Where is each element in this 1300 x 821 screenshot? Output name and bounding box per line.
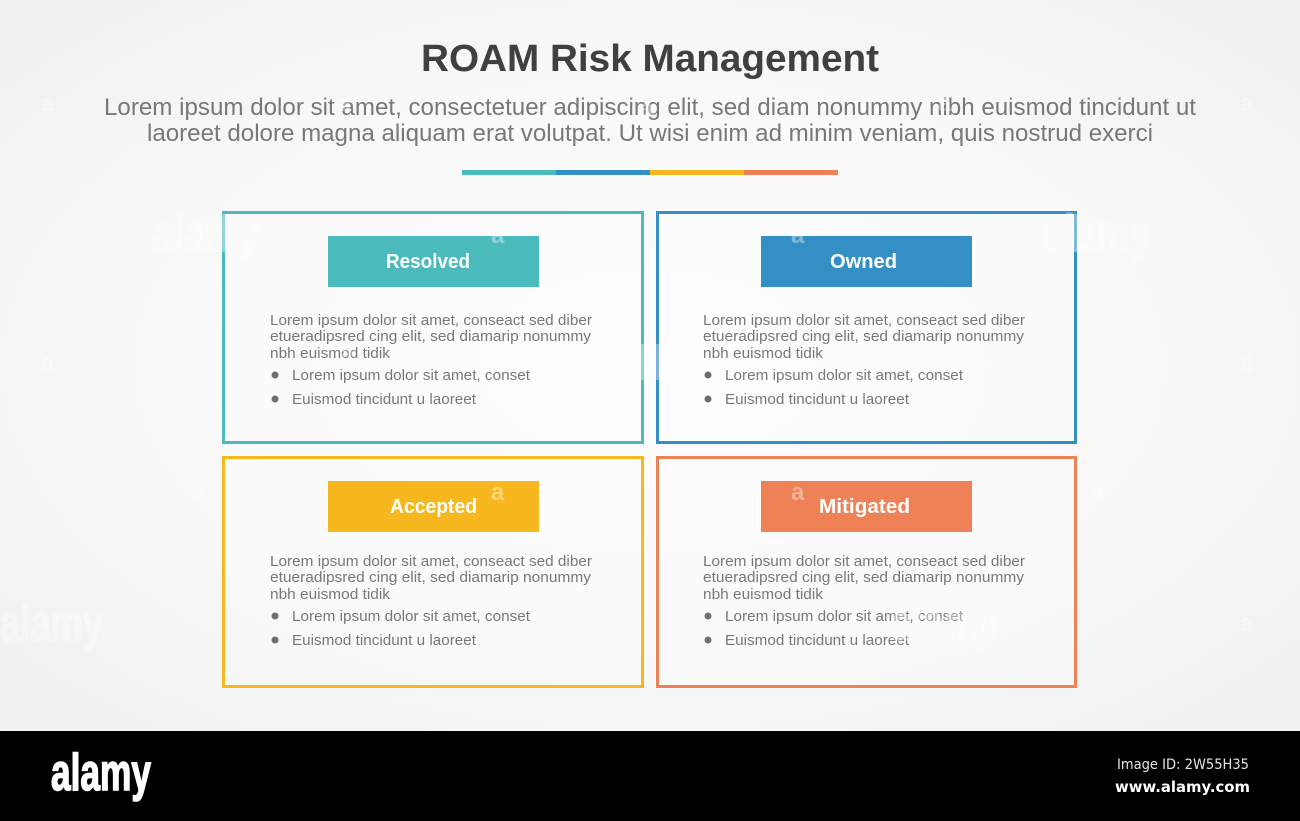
bullet list: Owned: Lorem ipsum dolor sit amet, conset xyxy=(725,368,963,384)
label: Mitigated: Mitigated xyxy=(819,496,910,518)
four-colour divider xyxy=(462,170,838,175)
text block: Owned description: nbh euismod tidik xyxy=(703,346,824,362)
text block: Owned description: Lorem ipsum dolor sit amet, conseact sed diber xyxy=(703,313,1025,329)
text block: Owned description xyxy=(703,313,1025,362)
stock photo watermarks xyxy=(0,90,1254,651)
stock photo watermarks: a xyxy=(791,479,805,506)
panel: Accepted xyxy=(224,458,642,686)
stock photo watermarks: a xyxy=(1240,350,1254,377)
stock photo watermarks: alamy xyxy=(1043,205,1151,261)
text block: Accepted description: Lorem ipsum dolor sit amet, conseact sed diber xyxy=(270,554,592,570)
stock photo watermarks: alamy xyxy=(891,595,999,651)
label: Resolved: Resolved xyxy=(386,251,470,273)
panel: Owned xyxy=(658,212,1076,442)
footer image id: Image ID: 2W55H35 xyxy=(1117,757,1249,773)
stock photo watermarks: a xyxy=(1240,90,1254,117)
text block: Mitigated description: etueradipsred cing elit, sed diamarip nonummy xyxy=(703,570,1025,586)
text block: Accepted description: nbh euismod tidik xyxy=(270,587,391,603)
panel: Mitigated xyxy=(658,458,1076,686)
bullet list: Owned: Euismod tincidunt u laoreet xyxy=(725,392,909,408)
text block: Accepted description xyxy=(270,554,592,603)
label: Owned xyxy=(761,236,972,287)
bullet list: Accepted: Lorem ipsum dolor sit amet, conset xyxy=(292,609,530,625)
subtitle text: laoreet dolore magna aliquam erat volutpat. Ut wisi enim ad minim veniam, quis nostrud exerci xyxy=(147,120,1153,147)
bullet list: Owned xyxy=(704,368,963,408)
title: ROAM Risk Management xyxy=(421,38,879,80)
stock photo watermarks: a xyxy=(338,90,352,117)
bullet list: Accepted: Euismod tincidunt u laoreet xyxy=(292,633,476,649)
bullet list: Resolved xyxy=(272,368,530,408)
stock photo watermarks: a xyxy=(640,95,654,122)
stock photo watermarks: a xyxy=(940,350,954,377)
stock photo watermarks: a xyxy=(340,340,354,367)
label: Mitigated xyxy=(761,481,972,532)
subtitle text xyxy=(104,94,1196,147)
bullet list: Resolved: Lorem ipsum dolor sit amet, conset xyxy=(292,368,530,384)
stock photo watermarks: alamy xyxy=(152,205,260,261)
bullet list: Mitigated: Lorem ipsum dolor sit amet, conset xyxy=(725,609,963,625)
stock photo watermarks: a xyxy=(41,90,55,117)
footer bar xyxy=(0,731,1300,821)
stock photo watermarks: a xyxy=(41,350,55,377)
text block: Mitigated description xyxy=(703,554,1025,603)
label: Accepted xyxy=(328,481,539,532)
bullet list: Mitigated: Euismod tincidunt u laoreet xyxy=(725,633,909,649)
label: Resolved xyxy=(328,236,539,287)
stock photo watermarks: a xyxy=(1091,479,1105,506)
stock photo watermarks: a xyxy=(491,222,505,249)
text block: Resolved description xyxy=(270,313,592,362)
footer url: www.alamy.com xyxy=(1115,778,1250,796)
stock photo watermarks: alamy xyxy=(0,595,103,651)
text block: Mitigated description: Lorem ipsum dolor sit amet, conseact sed diber xyxy=(703,554,1025,570)
stock photo watermarks: a xyxy=(791,222,805,249)
label: Owned: Owned xyxy=(830,251,897,273)
footer logo: alamy xyxy=(51,744,151,802)
text block: Accepted description: etueradipsred cing elit, sed diamarip nonummy xyxy=(270,570,592,586)
text block: Resolved description: Lorem ipsum dolor sit amet, conseact sed diber xyxy=(270,313,592,329)
stock photo watermarks: a xyxy=(191,479,205,506)
text block: Mitigated description: nbh euismod tidik xyxy=(703,587,824,603)
subtitle text: Lorem ipsum dolor sit amet, consectetuer adipiscing elit, sed diam nonummy nibh euismod tincidunt ut xyxy=(104,94,1196,121)
label: Accepted: Accepted xyxy=(390,496,477,518)
stock photo watermarks: a xyxy=(1240,610,1254,637)
text block: Resolved description: nbh euismod tidik xyxy=(270,346,391,362)
bullet list: Mitigated xyxy=(704,609,963,649)
stock photo watermarks: a xyxy=(938,90,952,117)
panel: Resolved xyxy=(224,212,642,442)
text block: Resolved description: etueradipsred cing elit, sed diamarip nonummy xyxy=(270,329,592,345)
bullet list: Resolved: Euismod tincidunt u laoreet xyxy=(292,392,476,408)
text block: Owned description: etueradipsred cing elit, sed diamarip nonummy xyxy=(703,329,1025,345)
stock photo watermarks: a xyxy=(491,479,505,506)
bullet list: Accepted xyxy=(272,609,530,649)
